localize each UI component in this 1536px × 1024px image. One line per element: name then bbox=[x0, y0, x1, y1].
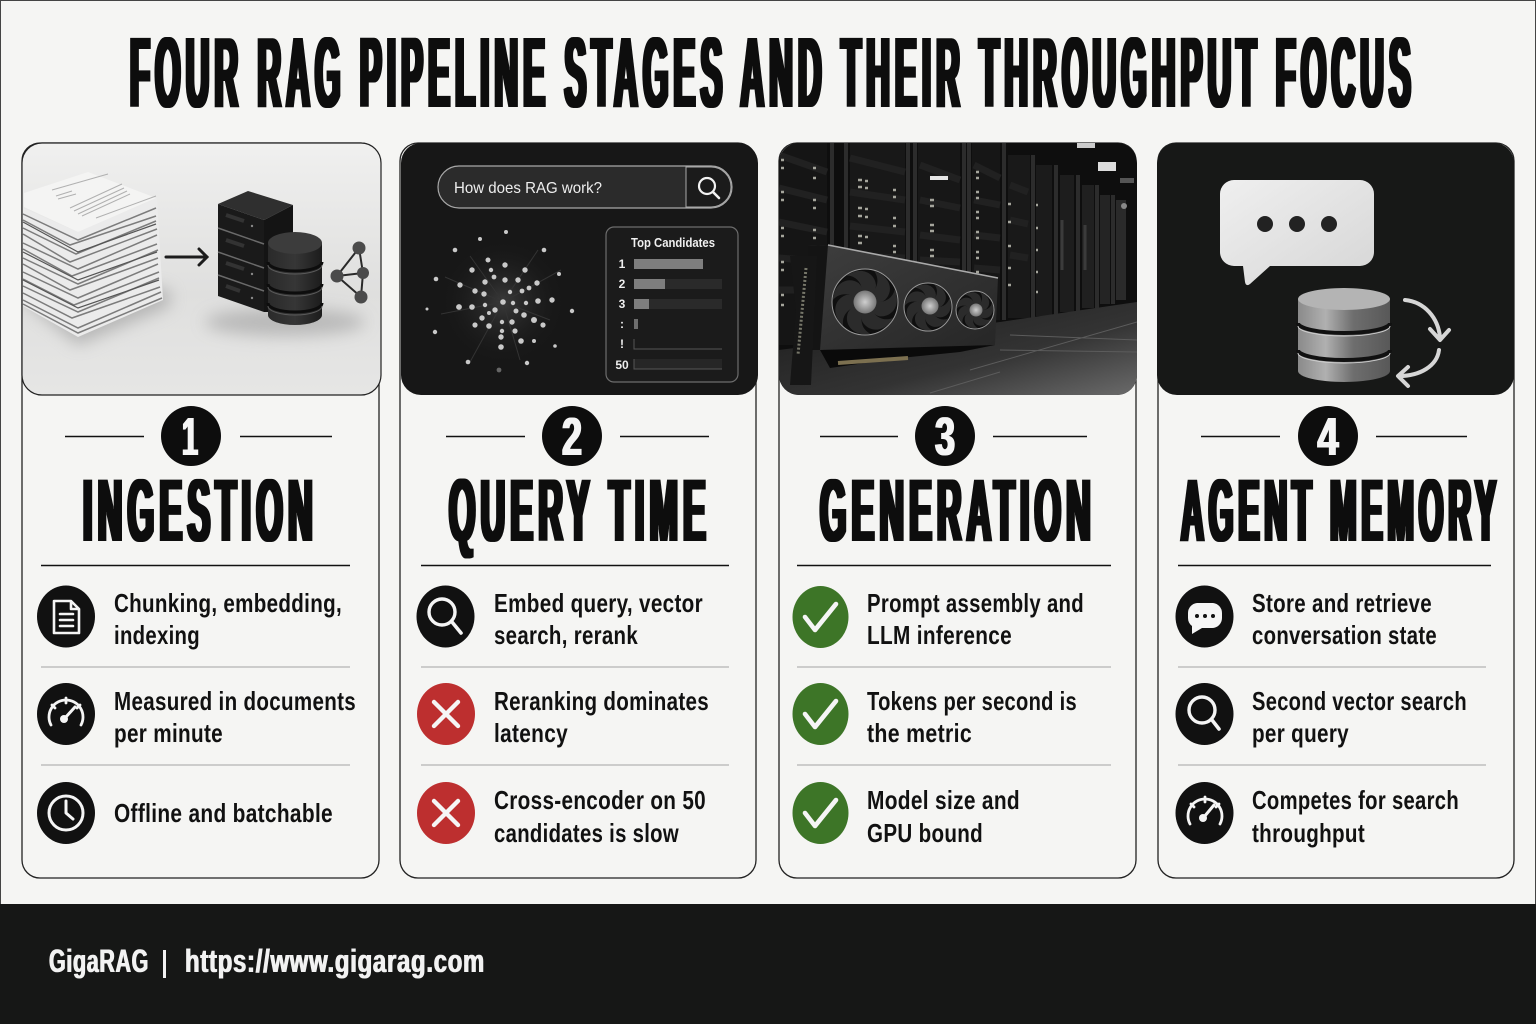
row: offline bbox=[37, 782, 333, 844]
footer text: GigaRAG bbox=[49, 943, 149, 979]
row: competes bbox=[1176, 782, 1459, 848]
row: tokens per second bbox=[792, 683, 1077, 748]
server racks bbox=[779, 143, 1134, 320]
stage number 2: 2 bbox=[562, 407, 582, 467]
stage number 4: 4 bbox=[1318, 407, 1338, 467]
row: embed query: Embed query, vector bbox=[494, 588, 703, 618]
row: cross-encoder bbox=[417, 782, 706, 848]
panel: agent memory bbox=[1157, 143, 1514, 878]
database cylinder bbox=[268, 232, 322, 325]
row: chunking: Chunking, embedding, bbox=[114, 588, 342, 618]
row: store and retrieve: conversation state bbox=[1252, 620, 1437, 650]
candidates panel bbox=[606, 227, 738, 382]
search box bbox=[438, 166, 732, 208]
stage number 3 bbox=[820, 406, 1087, 467]
row: cross-encoder: Cross-encoder on 50 bbox=[494, 785, 706, 815]
candidates panel: 2 bbox=[619, 277, 626, 291]
footer text bbox=[49, 943, 485, 979]
candidates panel: : bbox=[620, 317, 624, 331]
candidates panel: 3 bbox=[619, 297, 626, 311]
stage number 3: 3 bbox=[935, 407, 955, 467]
row: offline: Offline and batchable bbox=[114, 798, 333, 828]
row: chunking bbox=[37, 586, 342, 650]
floor bbox=[779, 302, 1137, 395]
illustration: search and candidates bbox=[401, 143, 758, 395]
text: QUERY TIME bbox=[449, 460, 711, 560]
row: cross-encoder: candidates is slow bbox=[494, 818, 679, 848]
row: embed query: search, rerank bbox=[494, 620, 638, 650]
paper stack bbox=[23, 251, 163, 337]
row: second vector search bbox=[1176, 683, 1467, 748]
card outline bbox=[1158, 143, 1514, 878]
illustration: documents to database bbox=[22, 143, 381, 395]
text: GENERATION bbox=[820, 460, 1096, 560]
row: prompt assembly: Prompt assembly and bbox=[867, 588, 1084, 618]
row: tokens per second: the metric bbox=[867, 718, 972, 748]
illustration: GPU in data center bbox=[779, 143, 1137, 395]
database cylinder bbox=[1298, 288, 1390, 382]
row: model size: GPU bound bbox=[867, 818, 983, 848]
sync arrows bbox=[1398, 300, 1449, 386]
stage number 1 bbox=[65, 406, 332, 467]
card outline bbox=[779, 143, 1136, 878]
vector scatter bbox=[426, 230, 574, 372]
row: prompt assembly bbox=[792, 586, 1084, 650]
footer band bbox=[0, 904, 1536, 1024]
graphics card bbox=[790, 245, 998, 385]
row: model size bbox=[792, 782, 1020, 848]
text: INGESTION bbox=[83, 460, 318, 560]
stage number 2 bbox=[446, 406, 709, 467]
row: reranking: latency bbox=[494, 718, 568, 748]
graph nodes bbox=[330, 242, 369, 304]
row: model size: Model size and bbox=[867, 785, 1020, 815]
stage number 1: 1 bbox=[182, 407, 198, 467]
footer text: https://www.gigarag.com bbox=[185, 943, 485, 979]
row: measured bbox=[37, 683, 356, 748]
row: competes: Competes for search bbox=[1252, 785, 1459, 815]
row: embed query bbox=[416, 586, 703, 650]
row: tokens per second: Tokens per second is bbox=[867, 686, 1077, 716]
row: chunking: indexing bbox=[114, 620, 200, 650]
row: measured: Measured in documents bbox=[114, 686, 356, 716]
candidates panel: ! bbox=[620, 337, 624, 351]
stage number 4 bbox=[1201, 406, 1467, 467]
row: second vector search: Second vector search bbox=[1252, 686, 1467, 716]
candidates panel: Top Candidates bbox=[631, 236, 715, 250]
row: competes: throughput bbox=[1252, 818, 1365, 848]
arrow bbox=[166, 249, 207, 265]
row: measured: per minute bbox=[114, 718, 223, 748]
panel: query time bbox=[400, 143, 758, 878]
candidates panel: 1 bbox=[619, 257, 626, 271]
candidates panel: 50 bbox=[615, 358, 629, 372]
row: store and retrieve bbox=[1176, 586, 1437, 650]
card outline bbox=[400, 143, 756, 878]
search box: How does RAG work? bbox=[454, 180, 602, 197]
illustration: chat and memory store bbox=[1157, 143, 1514, 395]
row: reranking bbox=[417, 683, 709, 748]
row: prompt assembly: LLM inference bbox=[867, 620, 1012, 650]
row: reranking: Reranking dominates bbox=[494, 686, 709, 716]
server stack bbox=[218, 191, 293, 312]
panel: generation bbox=[779, 143, 1137, 878]
panel: ingestion bbox=[22, 143, 381, 878]
chat bubble bbox=[1220, 180, 1374, 285]
fans bbox=[832, 268, 994, 336]
row: store and retrieve: Store and retrieve bbox=[1252, 588, 1432, 618]
card outline bbox=[22, 143, 379, 878]
row: second vector search: per query bbox=[1252, 718, 1349, 748]
